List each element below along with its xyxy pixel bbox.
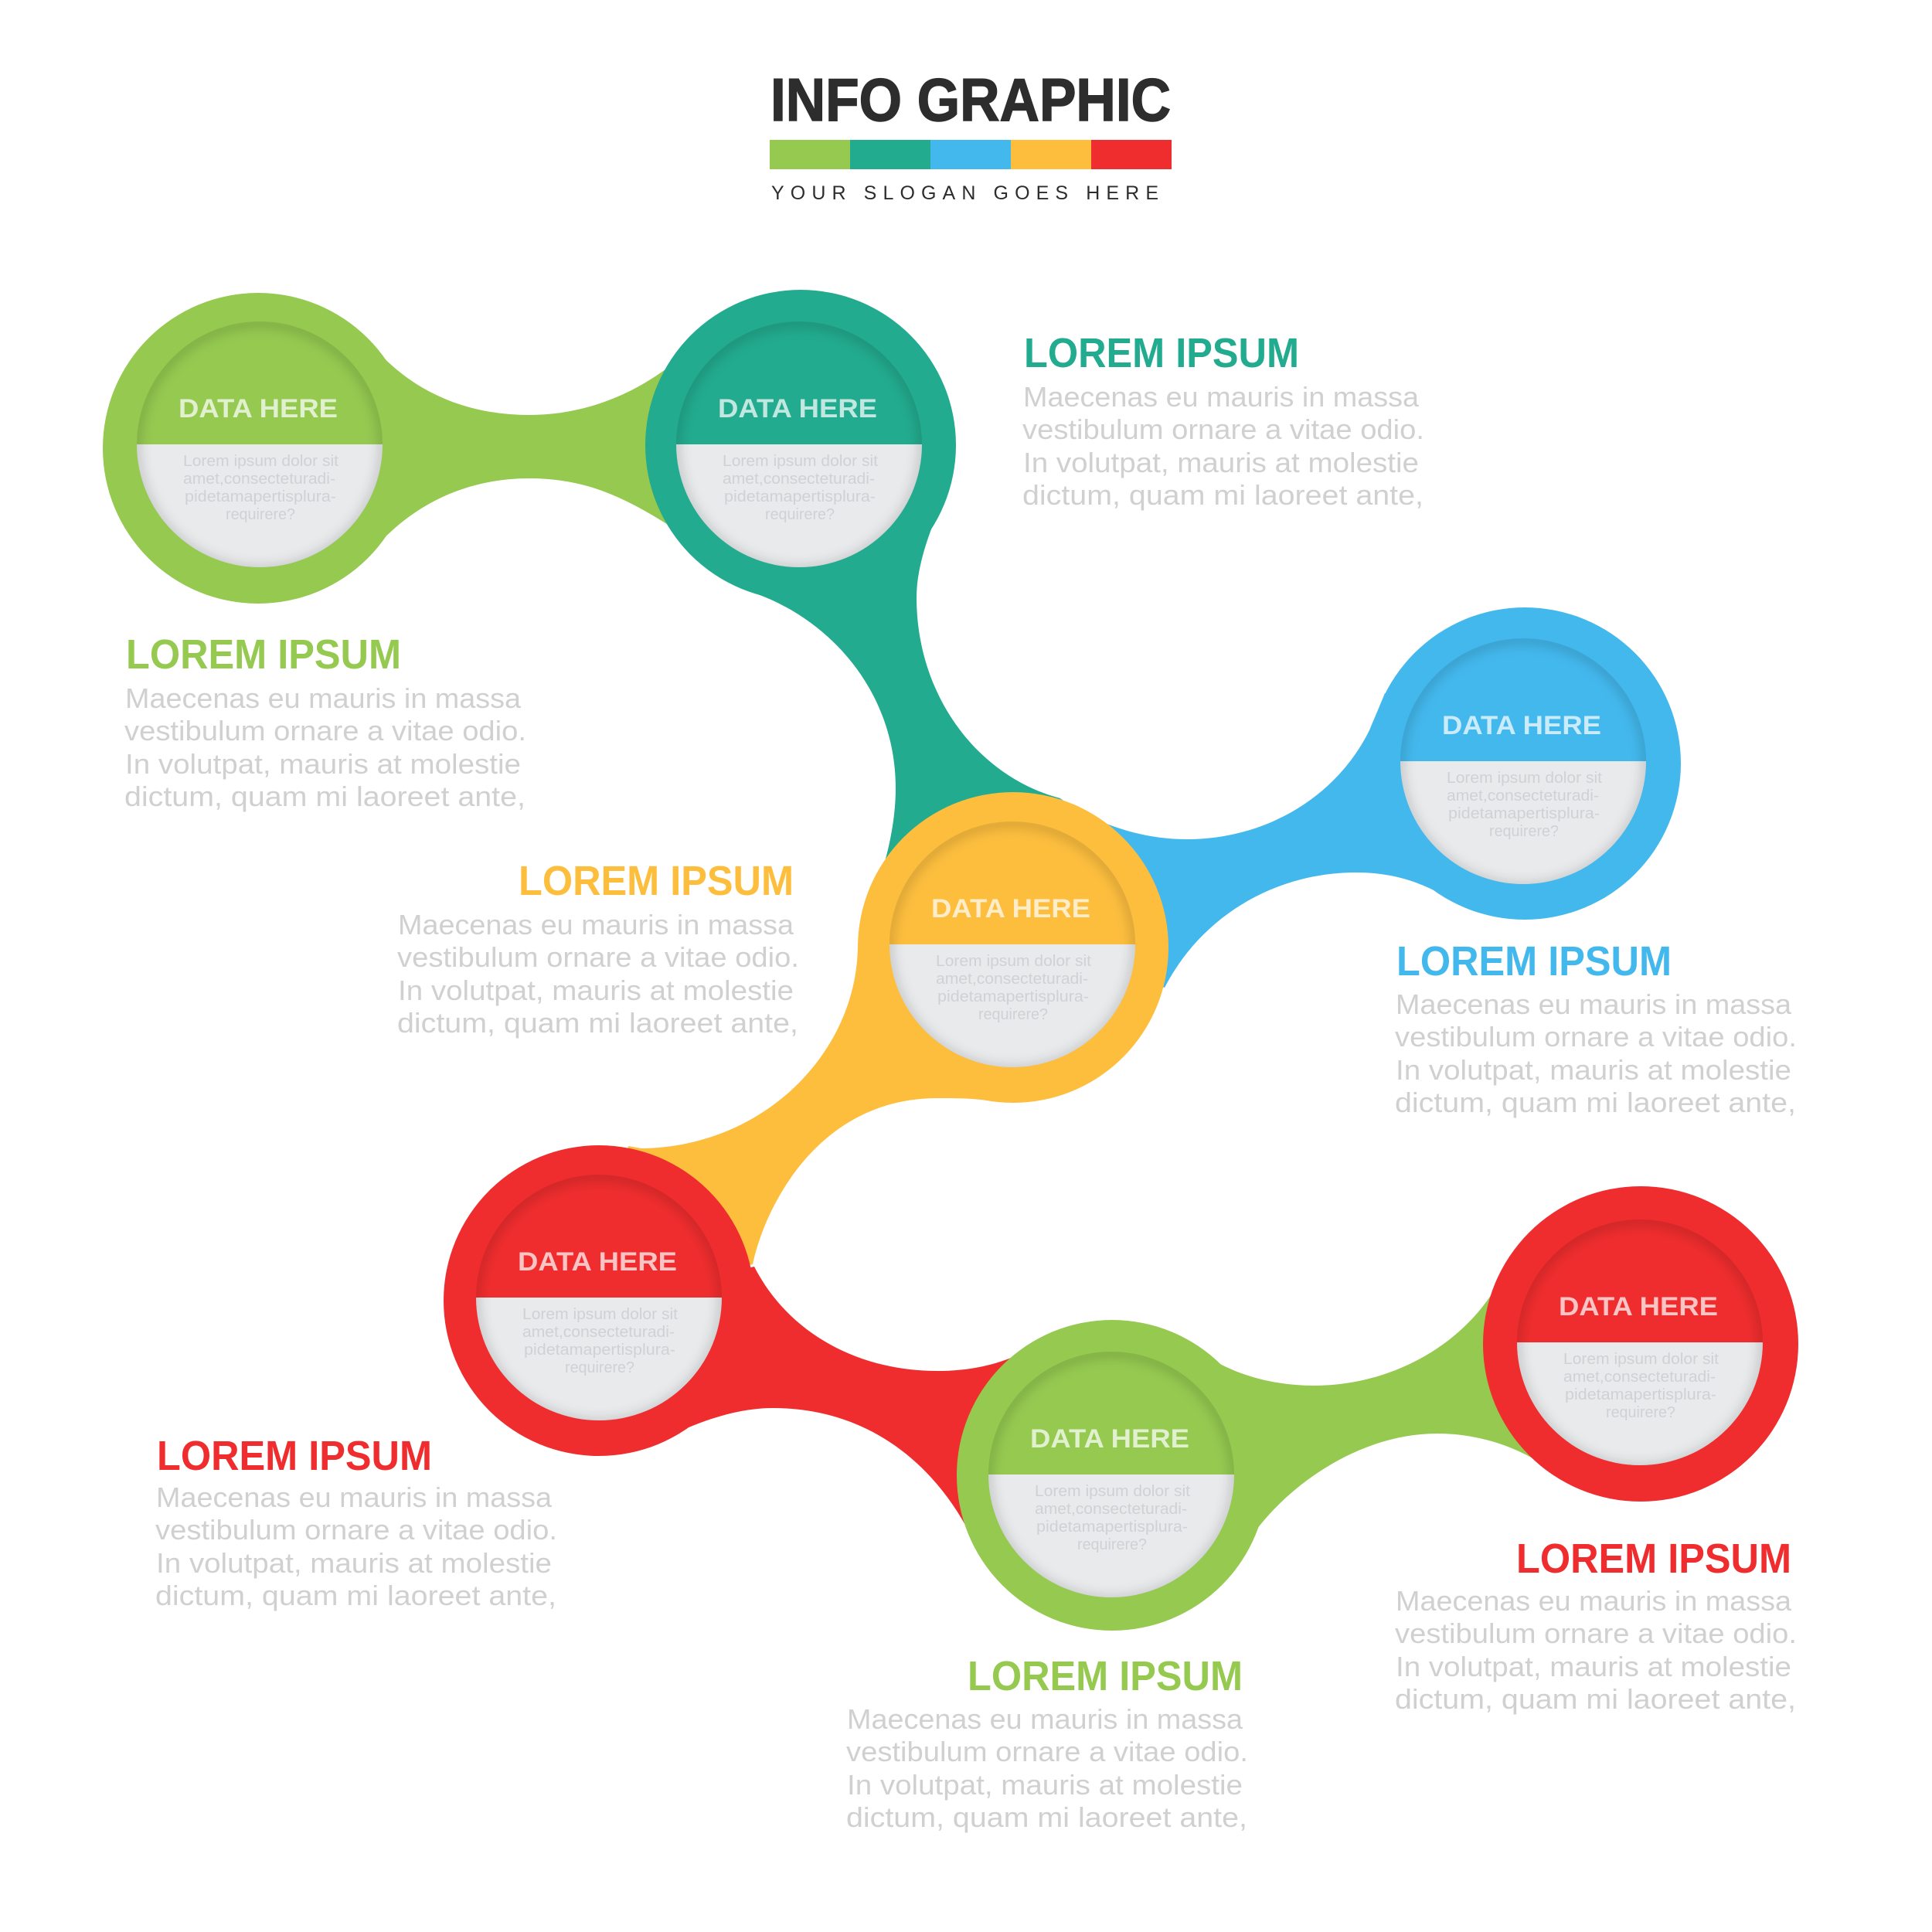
text block: green 2	[846, 1653, 1248, 1833]
text block: yellow: LOREM IPSUM	[519, 858, 794, 904]
node 6: green circle: amet,consecteturadi-	[1035, 1501, 1187, 1518]
text block: teal: LOREM IPSUM	[1024, 330, 1299, 376]
node 4: yellow circle: amet,consecteturadi-	[936, 971, 1088, 988]
node 6: green circle: Lorem ipsum dolor sit	[1035, 1483, 1190, 1500]
text block: green 1: Maecenas eu mauris in massa	[125, 682, 522, 714]
text block: blue: In volutpat, mauris at molestie	[1396, 1054, 1791, 1086]
node 6: green circle: pidetamapertisplura-	[1036, 1519, 1188, 1536]
node 7: red circle: requirere?	[1606, 1404, 1675, 1421]
text block: teal	[1022, 330, 1424, 511]
node 2: teal circle: Lorem ipsum dolor sit	[723, 453, 878, 470]
node 1: green circle: DATA HERE	[179, 394, 338, 423]
node 2: teal circle: requirere?	[765, 506, 835, 523]
node 3: blue circle: amet,consecteturadi-	[1447, 787, 1599, 804]
connector: teal to yellow	[707, 445, 1060, 947]
node 1: green circle: amet,consecteturadi-	[183, 471, 335, 488]
node 1: green circle: requirere?	[226, 506, 295, 523]
node 5: red circle	[444, 1145, 754, 1456]
node 5: red circle: amet,consecteturadi-	[522, 1324, 675, 1341]
infographic canvas	[103, 77, 1798, 1833]
text block: yellow: In volutpat, mauris at molestie	[398, 975, 794, 1006]
node 7: red circle: Lorem ipsum dolor sit	[1563, 1351, 1719, 1368]
text block: teal: dictum, quam mi laoreet ante,	[1022, 479, 1423, 511]
node 1: green circle: pidetamapertisplura-	[185, 488, 336, 505]
text block: red right: In volutpat, mauris at molestie	[1396, 1651, 1791, 1682]
text block: red right: vestibulum ornare a vitae odio.	[1395, 1617, 1797, 1649]
text block: red left: In volutpat, mauris at molestie	[156, 1547, 552, 1579]
node 4: yellow circle: pidetamapertisplura-	[937, 988, 1089, 1005]
text block: red right	[1395, 1536, 1797, 1715]
title block	[770, 66, 1172, 204]
slogan: YOUR SLOGAN GOES HERE	[771, 182, 1158, 204]
text block: red left: vestibulum ornare a vitae odio.	[155, 1514, 557, 1546]
node 4: yellow circle: Lorem ipsum dolor sit	[936, 953, 1091, 970]
connector: red to green	[599, 1267, 1112, 1526]
text block: green 1: dictum, quam mi laoreet ante,	[124, 781, 526, 812]
text block: red right: dictum, quam mi laoreet ante,	[1395, 1683, 1796, 1715]
node 7: red circle: amet,consecteturadi-	[1563, 1369, 1716, 1386]
text block: green 2: vestibulum ornare a vitae odio.	[846, 1736, 1248, 1767]
title: INFO GRAPHIC	[770, 66, 1171, 134]
connector: green to red	[1112, 1294, 1641, 1557]
node 7: red circle: pidetamapertisplura-	[1565, 1386, 1716, 1403]
node 7: red circle: DATA HERE	[1559, 1292, 1718, 1321]
text block: green 1: vestibulum ornare a vitae odio.	[124, 715, 526, 747]
node 2: teal circle: DATA HERE	[718, 394, 877, 423]
node 3: blue circle: requirere?	[1489, 823, 1559, 840]
text block: red left: LOREM IPSUM	[157, 1433, 432, 1479]
node 4: yellow circle: requirere?	[978, 1006, 1048, 1023]
text block: blue: vestibulum ornare a vitae odio.	[1395, 1021, 1797, 1053]
colour bar	[770, 140, 1172, 169]
text block: red right: Maecenas eu mauris in massa	[1396, 1585, 1792, 1617]
text block: red left: dictum, quam mi laoreet ante,	[155, 1580, 556, 1611]
text block: green 2: Maecenas eu mauris in massa	[847, 1703, 1243, 1735]
node 5: red circle: Lorem ipsum dolor sit	[522, 1306, 678, 1323]
text block: blue: LOREM IPSUM	[1396, 938, 1672, 985]
text block: yellow: dictum, quam mi laoreet ante,	[397, 1007, 798, 1039]
node 1: green circle	[103, 293, 413, 604]
text block: blue: Maecenas eu mauris in massa	[1396, 988, 1792, 1020]
node 6: green circle	[957, 1320, 1267, 1631]
node 1: green circle: Lorem ipsum dolor sit	[183, 453, 338, 470]
node 3: blue circle	[1369, 607, 1681, 920]
node 5: red circle: requirere?	[565, 1359, 634, 1376]
node 3: blue circle: pidetamapertisplura-	[1448, 805, 1600, 822]
text block: yellow	[397, 858, 799, 1039]
node 2: teal circle	[645, 290, 956, 600]
text block: red left	[155, 1433, 557, 1611]
text block: yellow: vestibulum ornare a vitae odio.	[397, 941, 799, 973]
text block: green 1	[124, 631, 526, 812]
text block: green 2: In volutpat, mauris at molestie	[847, 1769, 1243, 1801]
node 7: red circle	[1483, 1186, 1798, 1502]
text block: red left: Maecenas eu mauris in massa	[156, 1481, 553, 1513]
node 3: blue circle: Lorem ipsum dolor sit	[1447, 770, 1602, 787]
text block: teal: Maecenas eu mauris in massa	[1023, 381, 1420, 413]
connector: yellow to red	[599, 944, 1013, 1301]
node 5: red circle: DATA HERE	[518, 1247, 677, 1277]
text block: green 1: In volutpat, mauris at molestie	[125, 748, 521, 780]
node 2: teal circle: pidetamapertisplura-	[724, 488, 876, 505]
text block: blue	[1395, 938, 1797, 1118]
node 6: green circle: DATA HERE	[1030, 1424, 1189, 1454]
connector: green to teal	[369, 342, 669, 554]
text block: teal: vestibulum ornare a vitae odio.	[1022, 413, 1424, 445]
node 3: blue circle: DATA HERE	[1442, 711, 1601, 740]
connector: blue to yellow	[1013, 693, 1524, 988]
node 5: red circle: pidetamapertisplura-	[524, 1342, 675, 1359]
text block: red right: LOREM IPSUM	[1516, 1536, 1791, 1582]
text block: green 2: LOREM IPSUM	[968, 1653, 1243, 1699]
text block: blue: dictum, quam mi laoreet ante,	[1395, 1087, 1796, 1118]
node 2: teal circle: amet,consecteturadi-	[723, 471, 875, 488]
text block: yellow: Maecenas eu mauris in massa	[398, 909, 794, 940]
node 6: green circle: requirere?	[1077, 1536, 1147, 1553]
text block: teal: In volutpat, mauris at molestie	[1023, 447, 1419, 478]
text block: green 1: LOREM IPSUM	[126, 631, 401, 678]
text block: green 2: dictum, quam mi laoreet ante,	[846, 1801, 1247, 1833]
node 4: yellow circle	[858, 792, 1168, 1103]
node 4: yellow circle: DATA HERE	[931, 894, 1090, 923]
